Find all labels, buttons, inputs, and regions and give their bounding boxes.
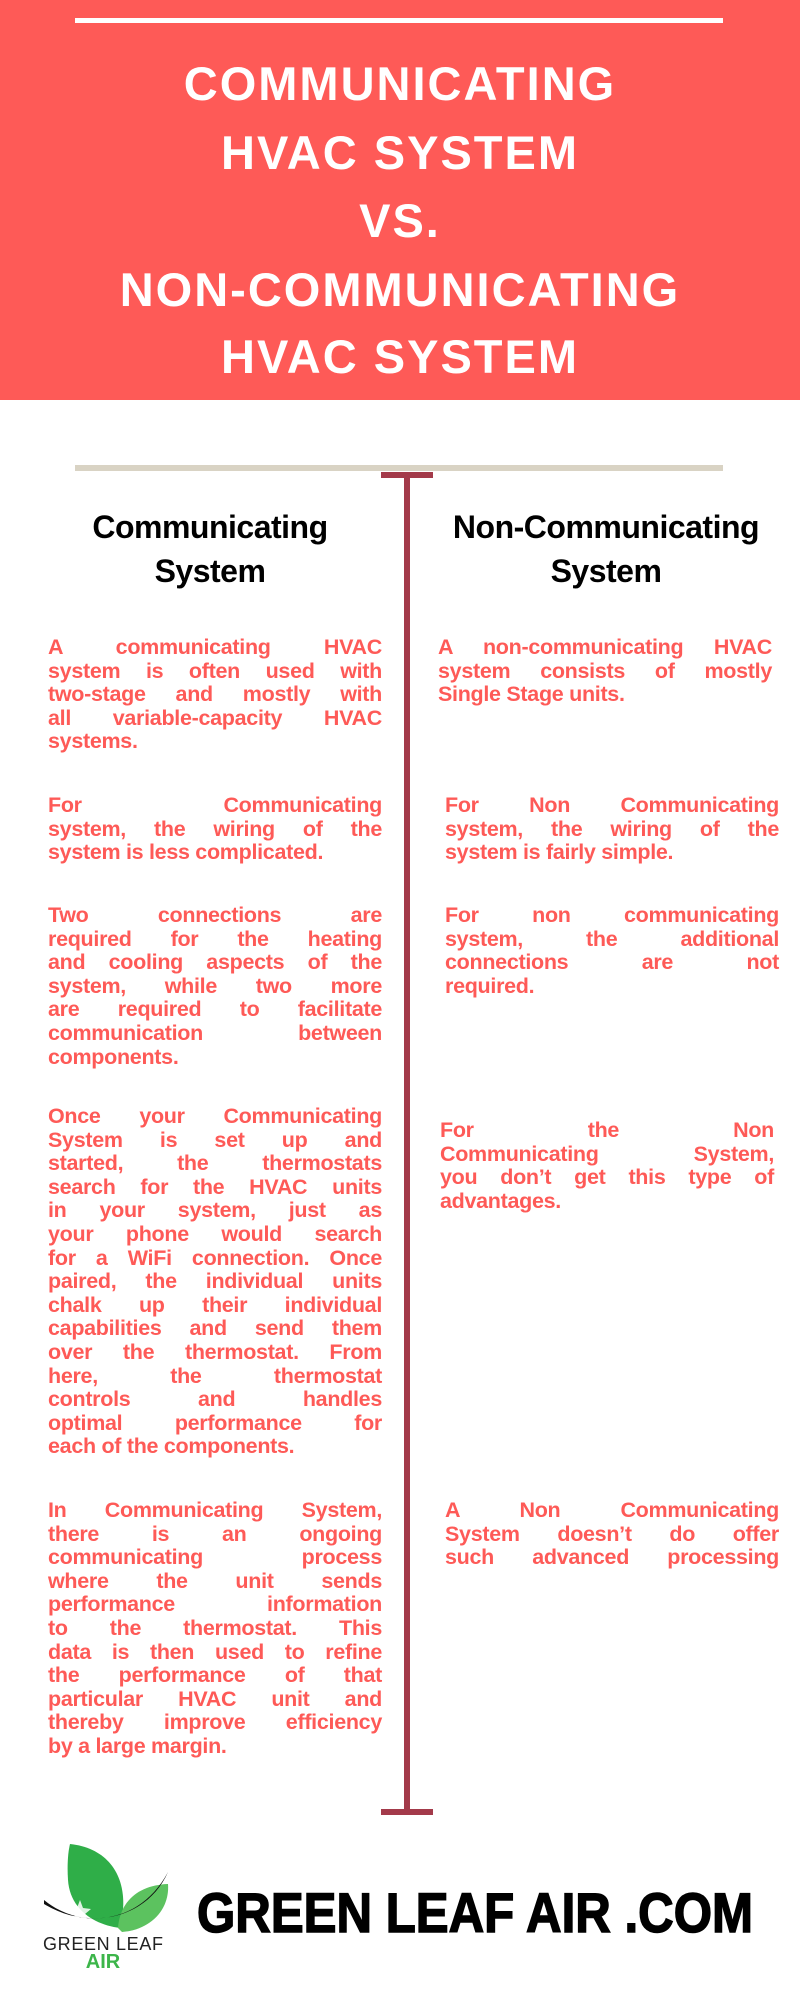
right block 4: you don’t get this type of [440,1165,774,1189]
right block 2 [445,793,779,864]
left block 2: system is less complicated. [48,840,323,864]
heading: communicating: System [155,553,265,589]
title [120,57,680,383]
left block 4: chalk up their individual [48,1293,382,1317]
logo [43,1844,168,1970]
heading: non-communicating: Non-Communicating [453,509,759,545]
heading: non-communicating [453,509,759,589]
right block 4: advantages. [440,1189,561,1213]
left block 3: Two connections are [48,903,382,927]
timeline vertical line [381,472,433,1815]
right block 1: Single Stage units. [438,682,625,706]
left block 5: by a large margin. [48,1734,227,1758]
right block 2: system, the wiring of the [445,817,779,841]
heading: non-communicating: System [551,553,661,589]
left block 4: capabilities and send them [48,1316,382,1340]
left block 4 [48,1104,382,1458]
title: HVAC SYSTEM [221,126,579,179]
right block 4: For the Non [440,1118,774,1142]
left block 1: system is often used with [48,659,382,683]
left block 2 [48,793,382,864]
left block 4: Once your Communicating [48,1104,382,1128]
left block 1 [48,635,382,753]
right block 3: For non communicating [445,903,779,927]
right block 5: A Non Communicating [445,1498,779,1522]
left block 4: your phone would search [48,1222,382,1246]
right block 4 [440,1118,774,1213]
left block 3: required for the heating [48,927,382,951]
right block 2: For Non Communicating [445,793,779,817]
logo: GREEN LEAF [43,1934,163,1954]
left block 3: system, while two more [48,974,382,998]
right block 5 [445,1498,779,1569]
left block 4: System is set up and [48,1128,382,1152]
left block 4: in your system, just as [48,1198,382,1222]
header top rule [75,18,723,23]
beige divider [75,465,723,471]
header band [0,0,800,400]
right block 4: Communicating System, [440,1142,774,1166]
title: NON-COMMUNICATING [120,263,680,316]
left block 4: controls and handles [48,1387,382,1411]
right block 5: System doesn’t do offer [445,1522,779,1546]
title: COMMUNICATING [184,57,616,110]
left block 1: systems. [48,729,138,753]
left block 3: communication between [48,1021,382,1045]
left block 5: In Communicating System, [48,1498,382,1522]
left block 5: thereby improve efficiency [48,1710,382,1734]
title: VS. [359,194,441,247]
left block 4: paired, the individual units [48,1269,382,1293]
left block 5: to the thermostat. This [48,1616,382,1640]
left block 1: A communicating HVAC [48,635,382,659]
right block 1: system consists of mostly [438,659,772,683]
left block 5: communicating process [48,1545,382,1569]
right block 3: system, the additional [445,927,779,951]
left block 4: search for the HVAC units [48,1175,382,1199]
title: HVAC SYSTEM [221,330,579,383]
left block 5: data is then used to refine [48,1640,382,1664]
left block 3: and cooling aspects of the [48,950,382,974]
left block 3: are required to facilitate [48,997,382,1021]
left block 5: where the unit sends [48,1569,382,1593]
right block 1 [438,635,772,706]
left block 2: For Communicating [48,793,382,817]
left block 5: performance information [48,1592,382,1616]
heading: communicating: Communicating [92,509,328,545]
right block 2: system is fairly simple. [445,840,673,864]
left block 4: for a WiFi connection. Once [48,1246,382,1270]
right block 1: A non-communicating HVAC [438,635,772,659]
right block 3: connections are not [445,950,779,974]
right block 5: such advanced processing [445,1545,779,1569]
left block 2: system, the wiring of the [48,817,382,841]
left block 4: started, the thermostats [48,1151,382,1175]
left block 1: two-stage and mostly with [48,682,382,706]
left block 3: components. [48,1045,178,1069]
left block 4: over the thermostat. From [48,1340,382,1364]
left block 4: here, the thermostat [48,1364,382,1388]
left block 5: particular HVAC unit and [48,1687,382,1711]
right block 3 [445,903,780,998]
right block 3: required. [445,974,534,998]
left block 5: there is an ongoing [48,1522,382,1546]
left block 4: optimal performance for [48,1411,382,1435]
left block 5: the performance of that [48,1663,382,1687]
left block 4: each of the components. [48,1434,294,1458]
heading: communicating [92,509,328,589]
left block 1: all variable-capacity HVAC [48,706,382,730]
left block 3 [48,903,382,1069]
left block 5 [48,1498,382,1758]
